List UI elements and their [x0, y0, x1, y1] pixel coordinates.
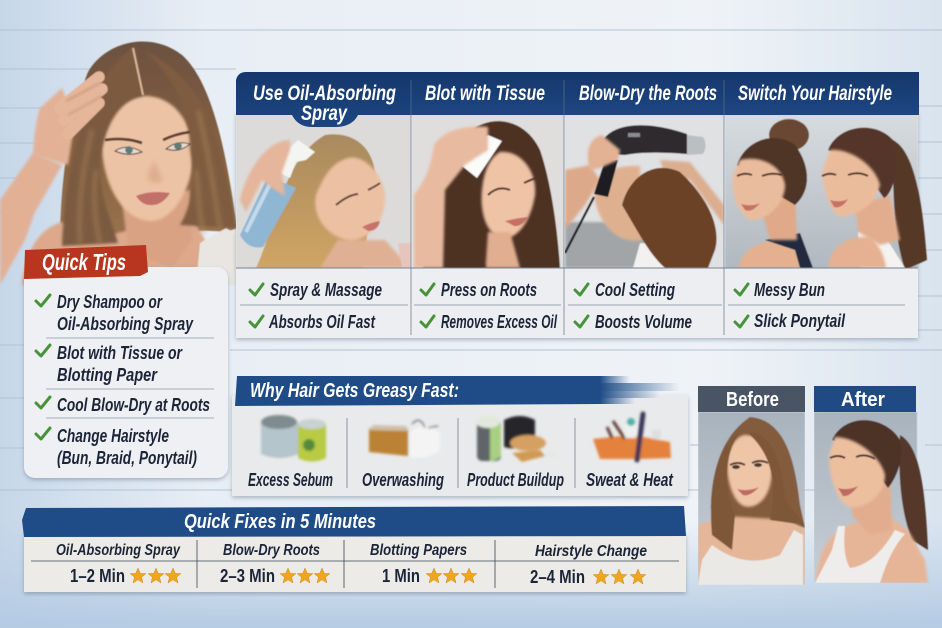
- fix 3 heading: [564, 72, 724, 115]
- panel: four fixes: [236, 72, 927, 338]
- column: oil-absorbing spray: [56, 542, 181, 586]
- fix 3 checklist: Cool Setting: [595, 280, 675, 300]
- photo: worried woman touching greasy hair: [0, 41, 238, 285]
- quick tips banner: Quick Tips: [42, 249, 126, 275]
- tip 3: Cool Blow-Dry at Roots: [57, 395, 210, 415]
- fix 1 heading: Spray: [301, 102, 348, 125]
- panel: after photo: [814, 386, 928, 583]
- tip 2: Blot with Tissue or: [57, 343, 183, 363]
- icon: product buildup items: [476, 416, 558, 462]
- fix 3 photo: blow-dry roots: [565, 112, 724, 268]
- before label: [698, 386, 805, 412]
- tip 1: Dry Shampoo or: [57, 292, 163, 312]
- icon: sweat and heat items: [593, 414, 671, 460]
- fix 1 checklist: [250, 280, 382, 332]
- fix 2 checklist: [421, 280, 558, 332]
- quick fixes heading banner: Quick Fixes in 5 Minutes: [184, 511, 376, 533]
- fix 4 checklist: Messy Bun: [754, 280, 825, 300]
- fix 2 heading: Blot with Tissue: [425, 82, 545, 105]
- fix 3 checklist: [575, 280, 692, 332]
- tip 3: [36, 395, 210, 415]
- fix 2 checklist: Removes Excess Oil: [441, 312, 558, 332]
- column: hairstyle change: [530, 543, 647, 587]
- column: hairstyle change: Hairstyle Change: [535, 543, 647, 560]
- fix 1 heading: [236, 72, 411, 127]
- cause labels: [248, 470, 674, 490]
- tip 4: (Bun, Braid, Ponytail): [57, 448, 197, 468]
- tip 2: Blotting Paper: [57, 365, 158, 385]
- tip 4: [36, 426, 197, 468]
- panel: quick tips: [24, 245, 228, 478]
- fix 1 photo: oil absorbing spray: [236, 112, 411, 268]
- column: blow-dry roots: Blow-Dry Roots: [223, 542, 320, 559]
- cause labels: Overwashing: [362, 470, 444, 490]
- fix 2 heading: [411, 72, 564, 115]
- column: hairstyle change: 2–4 Min: [530, 567, 585, 587]
- column: oil-absorbing spray: Oil-Absorbing Spray: [56, 542, 181, 559]
- column: blotting papers: Blotting Papers: [370, 542, 467, 559]
- fix 2 photo: blot with tissue: [412, 112, 564, 268]
- quick fixes heading banner: [22, 506, 686, 537]
- column: oil-absorbing spray: 1–2 Min: [70, 566, 125, 586]
- tip 1: Oil-Absorbing Spray: [57, 314, 194, 334]
- panel: quick fixes table: [22, 506, 686, 592]
- cause labels: Sweat & Heat: [586, 470, 674, 490]
- fix 1 checklist: Spray & Massage: [270, 280, 382, 300]
- after label: [814, 386, 916, 412]
- fix 2 checklist: Press on Roots: [441, 280, 537, 300]
- why heading banner: Why Hair Gets Greasy Fast:: [250, 380, 459, 402]
- fix 4 heading: [724, 72, 919, 115]
- tip 4: Change Hairstyle: [57, 426, 169, 446]
- column: blotting papers: 1 Min: [382, 566, 420, 586]
- cause labels: Product Buildup: [467, 470, 564, 490]
- fix 4 checklist: [735, 280, 846, 331]
- icon: overwashing items: [369, 420, 440, 458]
- column: blow-dry roots: [220, 542, 330, 586]
- column: blotting papers: [370, 542, 477, 586]
- tip 2: [36, 343, 183, 385]
- column: blow-dry roots: 2–3 Min: [220, 566, 275, 586]
- fix 3 heading: Blow-Dry the Roots: [579, 82, 717, 105]
- fix 4 photo: new hairstyles: [725, 112, 927, 270]
- quick tips banner: [24, 245, 148, 279]
- panel: before photo: [698, 386, 805, 585]
- tip 1: [36, 292, 194, 334]
- fix 4 checklist: Slick Ponytail: [754, 311, 846, 331]
- before label: Before: [726, 389, 779, 411]
- fix 3 checklist: Boosts Volume: [595, 312, 692, 332]
- fix 1 heading: Use Oil-Absorbing: [253, 82, 396, 105]
- after label: After: [841, 389, 885, 411]
- why heading banner: [235, 376, 680, 406]
- fix 1 checklist: Absorbs Oil Fast: [268, 312, 376, 332]
- cause labels: Excess Sebum: [248, 470, 333, 490]
- icon: excess sebum jars: [261, 415, 326, 462]
- panel: why hair gets greasy: [232, 376, 688, 496]
